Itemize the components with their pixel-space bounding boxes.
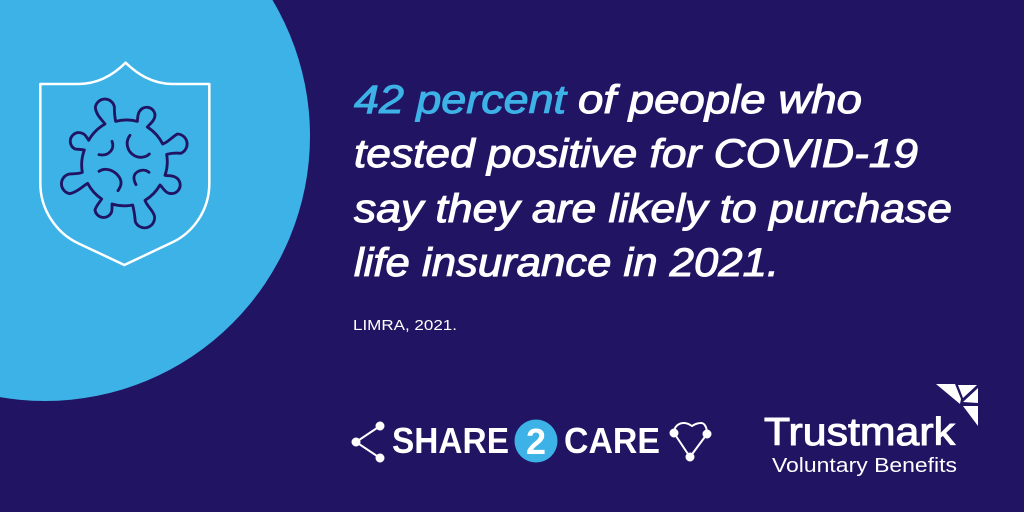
logo: Share 2 Care bbox=[352, 420, 710, 462]
icon: virus bbox=[61, 99, 187, 228]
icon: share nodes bbox=[352, 422, 384, 462]
heading line 2: tested positive for COVID-19 bbox=[354, 132, 918, 176]
heading line 4: life insurance in 2021. bbox=[354, 241, 779, 285]
logo word: Trustmark: Trustmark bbox=[764, 411, 956, 454]
logo word: care: CARE bbox=[564, 420, 660, 461]
icon: shield outline bbox=[40, 63, 209, 265]
heading line 1: 42 percent bbox=[354, 78, 568, 122]
icon: heart nodes bbox=[670, 423, 710, 460]
heading: statistic statement: of people who bbox=[578, 78, 862, 122]
logo subtitle: Voluntary Benefits bbox=[772, 455, 957, 477]
icon: shield with virus bbox=[40, 63, 209, 265]
logo: Trustmark Voluntary Benefits bbox=[764, 384, 978, 477]
heading: statistic statement bbox=[354, 78, 952, 285]
source text: LIMRA, 2021. bbox=[353, 317, 457, 334]
badge: 2: 2 bbox=[526, 421, 546, 462]
heading line 3: say they are likely to purchase bbox=[354, 187, 952, 231]
badge: 2 bbox=[514, 420, 558, 462]
icon: Trustmark mark bbox=[936, 384, 978, 426]
panel: blue circle bbox=[0, 0, 310, 401]
logo word: share: SHARE bbox=[392, 420, 509, 461]
